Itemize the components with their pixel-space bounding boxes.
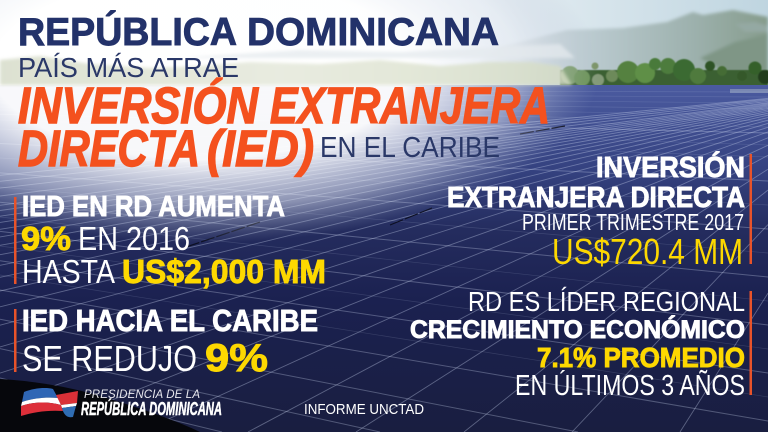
panel: IED hacia el Caribe (14, 303, 318, 380)
headline word 1: INVERSIÓN (18, 77, 259, 134)
title word 2: DOMINICANA (247, 11, 499, 54)
accent bar (750, 154, 752, 264)
title (18, 10, 550, 177)
background: panel grid lines (0, 90, 768, 432)
background: hazy mountains and trees at left (0, 44, 575, 85)
logo line 2: REPÚBLICA DOMINICANA (81, 398, 222, 419)
growth label: EN 2016 (78, 220, 190, 257)
growth figure: 9% (21, 220, 71, 257)
heading: IED HACIA EL CARIBE (22, 303, 318, 338)
subtitle: PAÍS MÁS ATRAE (18, 52, 239, 83)
heading line 2: EXTRANJERA DIRECTA (447, 182, 745, 214)
reduction figure: 9% (205, 337, 268, 380)
logo: Presidencia de la República Dominicana (21, 388, 222, 419)
panel: IED en RD aumenta (14, 191, 326, 290)
background: distant panel strip (730, 89, 768, 93)
icon: waving flag (21, 388, 78, 417)
accent bar (14, 309, 16, 372)
title word 1: REPÚBLICA (18, 10, 237, 54)
line 3: 7.1% PROMEDIO (537, 342, 745, 373)
logo line 1: PRESIDENCIA DE LA (84, 389, 200, 401)
headline word 2: EXTRANJERA (270, 77, 550, 134)
background: tree line (560, 58, 768, 86)
line 2: CRECIMIENTO ECONÓMICO (410, 314, 745, 344)
accent bar (14, 197, 16, 284)
headline word 4: (IED) (207, 120, 314, 177)
background: dark hill foreground (0, 379, 200, 432)
accent bar (750, 291, 752, 395)
amount figure: US$2,000 MM (122, 253, 326, 290)
reduction label: SE REDUJO (22, 338, 197, 379)
amount label: HASTA (22, 253, 115, 290)
source note: INFORME UNCTAD (304, 401, 424, 418)
background: mountains (480, 10, 768, 88)
panel: líder regional (410, 286, 752, 402)
background: dark panel seams (186, 126, 565, 247)
headline suffix: EN EL CARIBE (320, 132, 500, 164)
background: sky (0, 0, 768, 90)
heading line 1: INVERSIÓN (596, 150, 745, 184)
panel: inversión extranjera directa (447, 150, 752, 272)
heading: IED EN RD AUMENTA (22, 191, 285, 223)
headline word 3: DIRECTA (18, 120, 200, 177)
